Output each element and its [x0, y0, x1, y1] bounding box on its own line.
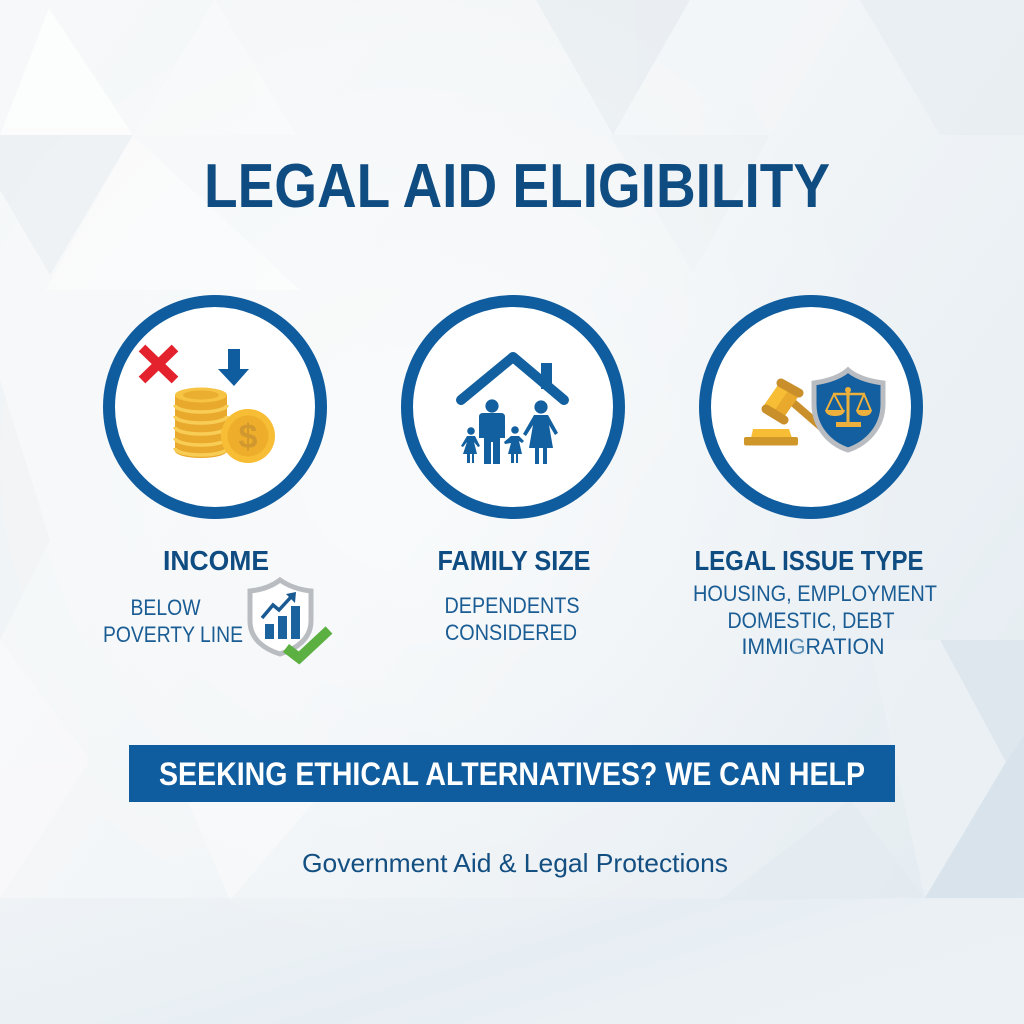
title: LEGAL AID ELIGIBILITY [204, 152, 830, 221]
family text: CONSIDERED [445, 620, 577, 645]
banner text: SEEKING ETHICAL ALTERNATIVES? WE CAN HELP [159, 756, 865, 792]
footer text: Government Aid & Legal Protections [302, 848, 728, 878]
icon: dollar coin [221, 409, 275, 463]
income text: POVERTY LINE [103, 622, 243, 647]
income heading: INCOME [163, 545, 269, 576]
legal heading: LEGAL ISSUE TYPE [694, 545, 924, 576]
legal text [693, 581, 937, 659]
icon: family under roof [461, 357, 564, 464]
family text [444, 593, 580, 645]
icon: shield with chart and check [250, 580, 329, 658]
icon: shield with scales [814, 370, 883, 450]
panel: family size [407, 301, 619, 645]
icon: coin stack [175, 388, 227, 458]
income text [103, 595, 243, 647]
banner [129, 745, 895, 802]
icon: gavel [744, 383, 826, 446]
icon: red cross [142, 348, 175, 380]
icon: down arrow [218, 349, 249, 386]
icon: dollar coin: $ [239, 418, 258, 456]
family circle [407, 301, 619, 513]
panel: income [103, 301, 329, 658]
legal text: HOUSING, EMPLOYMENT [693, 581, 937, 606]
panel: legal issue type [693, 301, 937, 659]
income text: BELOW [130, 595, 201, 620]
family text: DEPENDENTS [444, 593, 580, 618]
family heading: FAMILY SIZE [438, 545, 590, 576]
legal circle [705, 301, 917, 513]
legal text: DOMESTIC, DEBT [728, 608, 894, 633]
legal text: IMMIGRATION [742, 634, 884, 659]
income circle [109, 301, 321, 513]
